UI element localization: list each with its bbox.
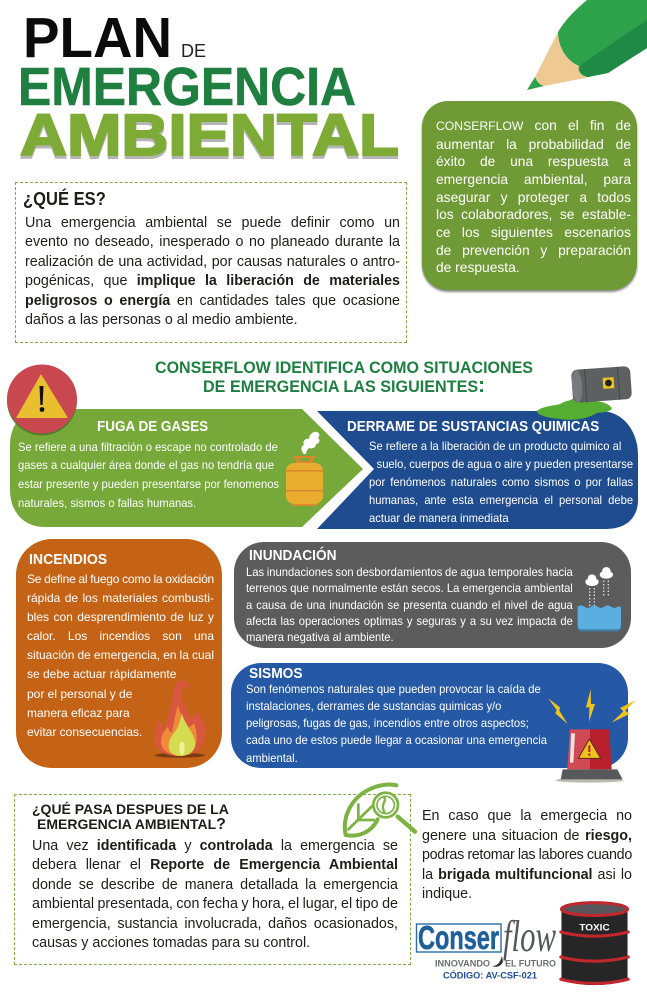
text: derrame description: Se refiere a la liberación de un producto quimico al: [369, 439, 621, 453]
text: derrame description: actuar de manera inmediata: [369, 511, 509, 525]
text: fuga description: gases a cualquier área donde el gas no tendría que: [18, 458, 274, 472]
text: fuga description: estar presente y pueden presentarse por fenomenos: [18, 477, 279, 491]
text: incendios description: bles con desprendimiento de luz y: [27, 610, 214, 624]
text: incendios description: por el personal y de: [27, 687, 132, 701]
arrow panel shape: [10, 409, 363, 527]
text: inundacion description: afecta las operaciones optimas y seguras y a su vez impacta de: [246, 614, 573, 628]
text: intro paragraph: [436, 118, 632, 275]
title: EMERGENCIA: [18, 57, 356, 117]
title: AMBIENTAL: [20, 106, 399, 171]
text: closing note: En caso que la emergecia no: [422, 808, 632, 824]
icon: spilled barrel: [537, 366, 632, 420]
text: derrame description: [369, 439, 633, 525]
text: after the emergency: emergencia, sustancia involucrada, daños ocasionados,: [32, 916, 398, 932]
text: intro paragraph: de prevención y preparación: [436, 243, 631, 258]
text: definition: pogénicas, que implique la liberación de materiales: [25, 273, 400, 289]
panel: incendios: [16, 539, 222, 768]
heading: que pasa despues: [32, 801, 229, 833]
text: definition: daños a las personas o al medio ambiente.: [25, 312, 298, 328]
heading: situaciones de emergencia: DE EMERGENCIA LAS SIGUIENTES:: [203, 374, 485, 397]
text: intro paragraph: éxito de una respuesta a: [436, 154, 631, 169]
text: sismos description: [246, 682, 547, 764]
text: incendios description: evitar consecuencias.: [27, 725, 142, 739]
heading: situaciones de emergencia: [155, 359, 533, 397]
icon: warning sign: [7, 364, 77, 436]
text: inundacion description: Las inundaciones son desbordamientos de agua temporales hacia: [246, 565, 573, 579]
text: definition: peligrosos o energía en cantidades tales que ocasione: [25, 293, 400, 309]
text: after the emergency: donde se describe de manera detallada la emergencia: [32, 877, 398, 893]
heading: sismos: SISMOS: [249, 666, 303, 682]
text: fuga description: [18, 440, 279, 510]
text: after the emergency: ambiental presentada, con fecha y hora, el lugar, el tipo de: [32, 896, 398, 912]
text: sismos description: peligrosas, fugas de gas, incendios entre otros aspectos;: [246, 716, 529, 730]
text: definition: evento no deseado, inesperado o no planeado durante la: [25, 234, 400, 250]
text: intro paragraph: CONSERFLOW con el fin de: [436, 118, 631, 133]
text: incendios description: rápida de los materiales combusti-: [27, 591, 214, 605]
title: [18, 6, 399, 171]
text: inundacion description: a causa de una inundación se presenta cuando el nivel de agua: [246, 598, 573, 612]
text: sismos description: cada uno de estos puede llegar a ocasionar una emergencia: [246, 733, 547, 747]
text: definition: Una emergencia ambiental se puede definir como un: [25, 214, 400, 230]
chevron panel shape: [317, 411, 638, 529]
icon: toxic barrel: [559, 901, 630, 986]
logo: conserflow: [416, 912, 556, 982]
text: after the emergency: [32, 838, 398, 951]
text: sismos description: ambiental.: [246, 750, 298, 764]
text: after the emergency: Una vez identificada y controlada la emergencia se: [32, 838, 398, 854]
text: closing note: [422, 808, 632, 902]
text: inundacion description: manera negativa al ambiente.: [246, 630, 394, 644]
text: closing note: la brigada multifuncional asi lo: [422, 867, 632, 883]
text: after the emergency: debera llenar el Reporte de Emergencia Ambiental: [32, 857, 398, 873]
text: derrame description: por fenómenos naturales como sismos o por fallas: [369, 475, 633, 489]
text: incendios description: calor. Los incendios son una: [27, 629, 214, 643]
logo: conserflow: CÓDIGO: AV-CSF-021: [443, 970, 538, 982]
logo: conserflow: EL FUTURO: [505, 958, 556, 970]
icon: fire: [154, 680, 206, 758]
logo: conserflow: Conser: [418, 919, 499, 956]
text: intro paragraph: emergencia ambiental, para: [436, 172, 631, 187]
panel: que pasa despues: [14, 794, 411, 965]
text: definition: [25, 214, 400, 328]
icon: rain and flood: [578, 567, 621, 632]
text: incendios description: Se define al fuego como la oxidación: [27, 572, 214, 586]
text: closing note: podras retomar las labores cuando: [422, 847, 632, 863]
heading: situaciones de emergencia: CONSERFLOW IDENTIFICA COMO SITUACIONES: [155, 359, 533, 377]
heading: que pasa despues: ¿QUÉ PASA DESPUES DE LA: [32, 801, 229, 817]
text: closing note: indique.: [422, 886, 472, 902]
panel: derrame de sustancias quimicas: [317, 411, 638, 529]
text: derrame description: suelo, cuerpos de agua o aire y pueden presentarse: [377, 457, 633, 471]
text: intro paragraph: los colaboradores, se estable-: [436, 207, 631, 222]
text: derrame description: humanas, ante esta emergencia el personal debe: [369, 493, 633, 507]
text: intro paragraph: asegurar y proteger a todos: [436, 190, 631, 205]
heading: fuga de gases: FUGA DE GASES: [97, 419, 208, 435]
icon: siren with lightning: [548, 690, 636, 783]
text: fuga description: Se refiere a una filtración o escape no controlado de: [18, 440, 278, 454]
title: DE: [181, 41, 206, 61]
heading: que pasa despues: EMERGENCIA AMBIENTAL?: [37, 816, 226, 833]
text: intro paragraph: ce los siguientes escenarios: [436, 225, 631, 240]
heading: inundacion: INUNDACIÓN: [249, 548, 337, 564]
heading: incendios: INCENDIOS: [29, 552, 107, 568]
text: sismos description: instalaciones, derrames de sustancias quimicas y/o: [246, 699, 501, 713]
panel: conserflow intro: [422, 101, 637, 290]
icon: green pencil: [527, 0, 647, 90]
panel: inundacion: [234, 542, 631, 648]
text: incendios description: manera eficaz para: [27, 706, 130, 720]
icon: toxic barrel: TOXIC: [579, 922, 610, 932]
panel: que es: [15, 182, 407, 343]
text: fuga description: naturales, sismos o fallas humanas.: [18, 496, 196, 510]
icon: leaf and magnifier: [342, 782, 418, 838]
text: intro paragraph: aumentar la probabilidad de: [436, 137, 631, 152]
text: intro paragraph: de respuesta.: [436, 260, 520, 275]
heading: que es: ¿QUÉ ES?: [23, 189, 106, 209]
title: AMBIENTAL: [20, 103, 399, 168]
text: inundacion description: terrenos que normalmente están secos. La emergencia ambiental: [246, 581, 573, 595]
logo: conserflow: INNOVANDO: [435, 958, 490, 970]
panel: fuga de gases: [10, 409, 363, 527]
logo: conserflow: flow: [503, 912, 556, 961]
heading: derrame: DERRAME DE SUSTANCIAS QUIMICAS: [347, 419, 599, 435]
text: sismos description: Son fenómenos naturales que pueden provocar la caída de: [246, 682, 541, 696]
text: after the emergency: causas y acciones tomadas para su control.: [32, 935, 310, 951]
icon: gas cylinder: [286, 432, 323, 506]
text: closing note: genere una situacion de riesgo,: [422, 828, 632, 844]
text: incendios description: se debe actuar rápidamente: [27, 667, 176, 681]
text: definition: realización de una actividad, por causas naturales o antro-: [25, 254, 400, 270]
panel: sismos: [231, 663, 628, 768]
text: incendios description: [27, 572, 214, 739]
title: PLAN: [23, 6, 172, 70]
text: inundacion description: [246, 565, 573, 644]
text: incendios description: situación de emergencia, en la cual: [27, 648, 214, 662]
